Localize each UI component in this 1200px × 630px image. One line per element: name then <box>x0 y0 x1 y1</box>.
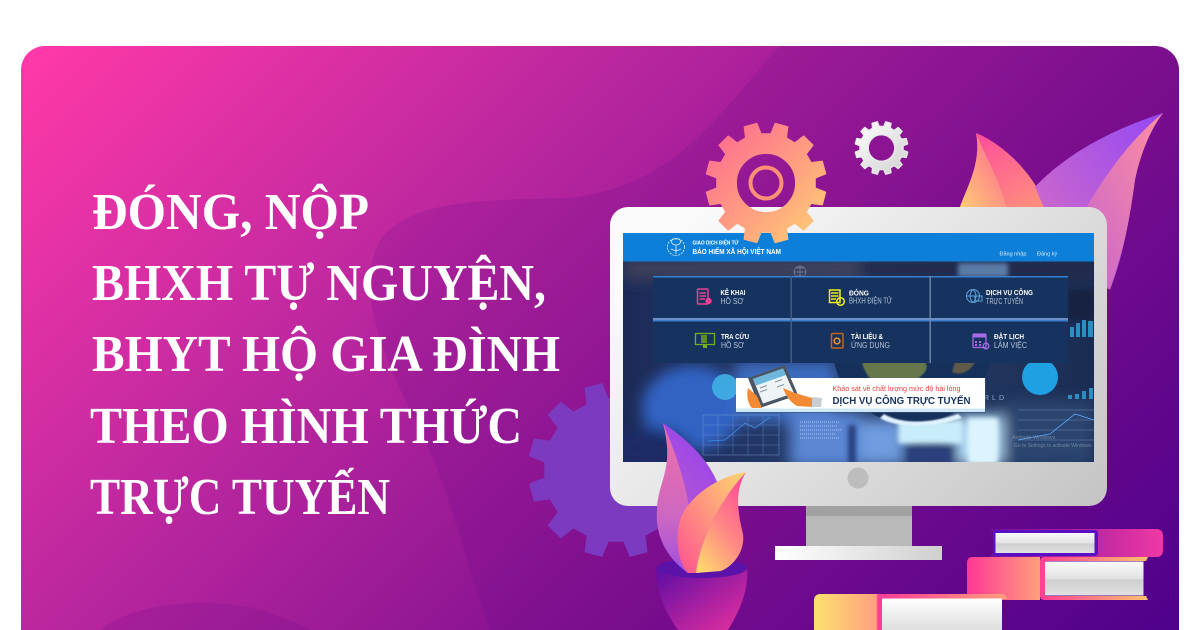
tile: kê khai hồ sơ: HỒ SƠ <box>720 296 744 306</box>
login links: Đăng nhập <box>1000 252 1026 258</box>
tile: dịch vụ công trực tuyến <box>966 288 1033 306</box>
tile: đặt lịch làm việc: LÀM VIỆC <box>994 341 1027 350</box>
icon: white gear <box>855 122 908 174</box>
service tile grid <box>653 276 1068 363</box>
icon: purple gear behind monitor <box>529 383 703 557</box>
leaf: purple <box>657 423 735 573</box>
earth globe <box>834 362 990 426</box>
site name: GIAO DỊCH ĐIỆN TỬ <box>692 238 739 246</box>
plant pot <box>657 558 747 630</box>
title: BHYT HỘ GIA ĐÌNH <box>92 325 560 383</box>
data circles <box>712 359 1058 400</box>
book: bottom <box>814 594 1008 630</box>
title: BHXH TỰ NGUYỆN, <box>92 254 546 312</box>
tile: đặt lịch làm việc: ĐẶT LỊCH <box>994 332 1024 341</box>
bar chart on screen <box>1068 320 1093 399</box>
book: middle <box>967 557 1148 600</box>
website screen <box>610 233 1094 468</box>
icon: tablet with hands <box>747 365 822 408</box>
survey text: Khảo sát về chất lượng mức độ hài lòng <box>832 384 960 393</box>
tile: dịch vụ công trực tuyến: DỊCH VỤ CÔNG <box>986 288 1033 297</box>
tile: đặt lịch làm việc <box>973 332 1027 350</box>
monitor <box>610 207 1107 560</box>
monitor camera <box>848 468 868 488</box>
tile: tra cứu hồ sơ <box>696 332 749 350</box>
tile: tài liệu và ứng dụng: ỨNG DỤNG <box>851 341 890 350</box>
site header bar <box>623 233 1094 262</box>
screen background photo <box>623 262 1094 462</box>
screen faint labels <box>984 395 1093 449</box>
title: TRỰC TUYẾN <box>90 466 390 526</box>
survey text <box>832 384 970 407</box>
title <box>90 183 560 526</box>
leaf: pink right <box>696 472 746 573</box>
screen faint labels: Activate Windows <box>1012 435 1056 441</box>
screen faint labels: Go to Settings to activate Windows. <box>1014 443 1093 449</box>
leaf: yellow left <box>678 472 746 573</box>
screen faint labels: RLD <box>984 395 1007 402</box>
monitor stand <box>775 505 942 560</box>
monitor frame <box>610 207 1107 506</box>
site name <box>692 238 781 256</box>
line charts on screen <box>703 410 1094 455</box>
tile: tài liệu và ứng dụng <box>832 332 890 350</box>
tile: dịch vụ công trực tuyến: TRỰC TUYẾN <box>986 296 1023 306</box>
small world icon above tiles <box>794 266 806 278</box>
site logo <box>668 238 684 256</box>
title: THEO HÌNH THỨC <box>90 397 522 455</box>
icon: orange gear <box>707 124 825 242</box>
plant leaves <box>657 423 746 573</box>
login links: Đăng ký <box>1037 252 1057 258</box>
icon: purple leaf behind monitor <box>1035 113 1163 290</box>
books <box>814 529 1163 630</box>
login links <box>1000 252 1058 256</box>
tile: đóng bhxh điện tử: ĐÓNG <box>849 288 869 298</box>
background blob: bottom left <box>100 603 312 630</box>
tile: đóng bhxh điện tử <box>830 288 892 306</box>
site name: BẢO HIỂM XÃ HỘI VIỆT NAM <box>692 247 781 256</box>
tile: đóng bhxh điện tử: BHXH ĐIỆN TỬ <box>849 296 892 306</box>
survey text: DỊCH VỤ CÔNG TRỰC TUYẾN <box>832 394 970 407</box>
icon: orange leaf behind monitor <box>959 133 1048 210</box>
tile: kê khai hồ sơ <box>698 288 746 306</box>
title: ĐÓNG, NỘP <box>92 183 369 241</box>
survey banner <box>736 365 986 413</box>
background blob: right <box>370 46 1179 630</box>
book: top <box>990 529 1163 557</box>
tile: kê khai hồ sơ: KÊ KHAI <box>720 288 746 297</box>
tile: tài liệu và ứng dụng: TÀI LIỆU & <box>851 332 884 341</box>
tile: tra cứu hồ sơ: TRA CỨU <box>721 332 749 341</box>
leaf: purple left facet <box>657 423 696 573</box>
tile: tra cứu hồ sơ: HỒ SƠ <box>721 340 744 350</box>
